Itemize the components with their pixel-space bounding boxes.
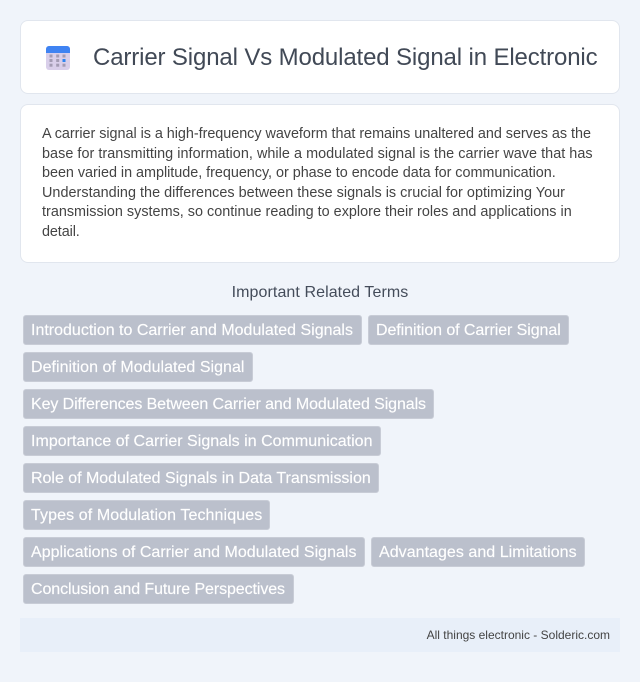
description text: detail. bbox=[42, 224, 80, 240]
tag bbox=[23, 315, 362, 345]
tag bbox=[371, 537, 585, 567]
footer credit: All things electronic - Solderic.com bbox=[427, 628, 610, 642]
description text: Understanding the differences between these signals is crucial for optimizing Your bbox=[42, 184, 565, 200]
description text: been varied in amplitude, frequency, or phase to encode data for communication. bbox=[42, 165, 556, 181]
tag bbox=[23, 389, 434, 419]
tag bbox=[23, 463, 379, 493]
tag: Introduction to Carrier and Modulated Signals bbox=[31, 322, 353, 339]
tag: Applications of Carrier and Modulated Signals bbox=[31, 544, 357, 561]
description text: base for transmitting information, while a modulated signal is the carrier wave that has bbox=[42, 146, 593, 162]
tag: Definition of Carrier Signal bbox=[376, 322, 561, 339]
tag bbox=[23, 426, 381, 456]
tag: Definition of Modulated Signal bbox=[31, 359, 244, 376]
tag bbox=[23, 574, 294, 604]
icon: calendar bbox=[46, 46, 70, 70]
tag: Role of Modulated Signals in Data Transmission bbox=[31, 470, 371, 487]
description text: transmission systems, so continue reading to explore their roles and applications in bbox=[42, 204, 572, 220]
tag bbox=[23, 537, 365, 567]
tag: Key Differences Between Carrier and Modulated Signals bbox=[31, 396, 426, 413]
description text bbox=[42, 126, 593, 240]
related terms tags bbox=[23, 315, 585, 604]
tag: Types of Modulation Techniques bbox=[31, 507, 262, 524]
tag: Advantages and Limitations bbox=[379, 544, 577, 561]
title: Carrier Signal Vs Modulated Signal in Electronic bbox=[93, 44, 597, 71]
tag: Importance of Carrier Signals in Communication bbox=[31, 433, 373, 450]
footer bbox=[20, 618, 620, 652]
header panel bbox=[20, 20, 620, 94]
panel: description bbox=[20, 104, 620, 263]
description text: A carrier signal is a high-frequency waveform that remains unaltered and serves as the bbox=[42, 126, 591, 142]
tag bbox=[23, 352, 253, 382]
heading: related terms: Important Related Terms bbox=[232, 284, 408, 301]
tag bbox=[368, 315, 569, 345]
tag: Conclusion and Future Perspectives bbox=[31, 581, 285, 598]
tag bbox=[23, 500, 270, 530]
